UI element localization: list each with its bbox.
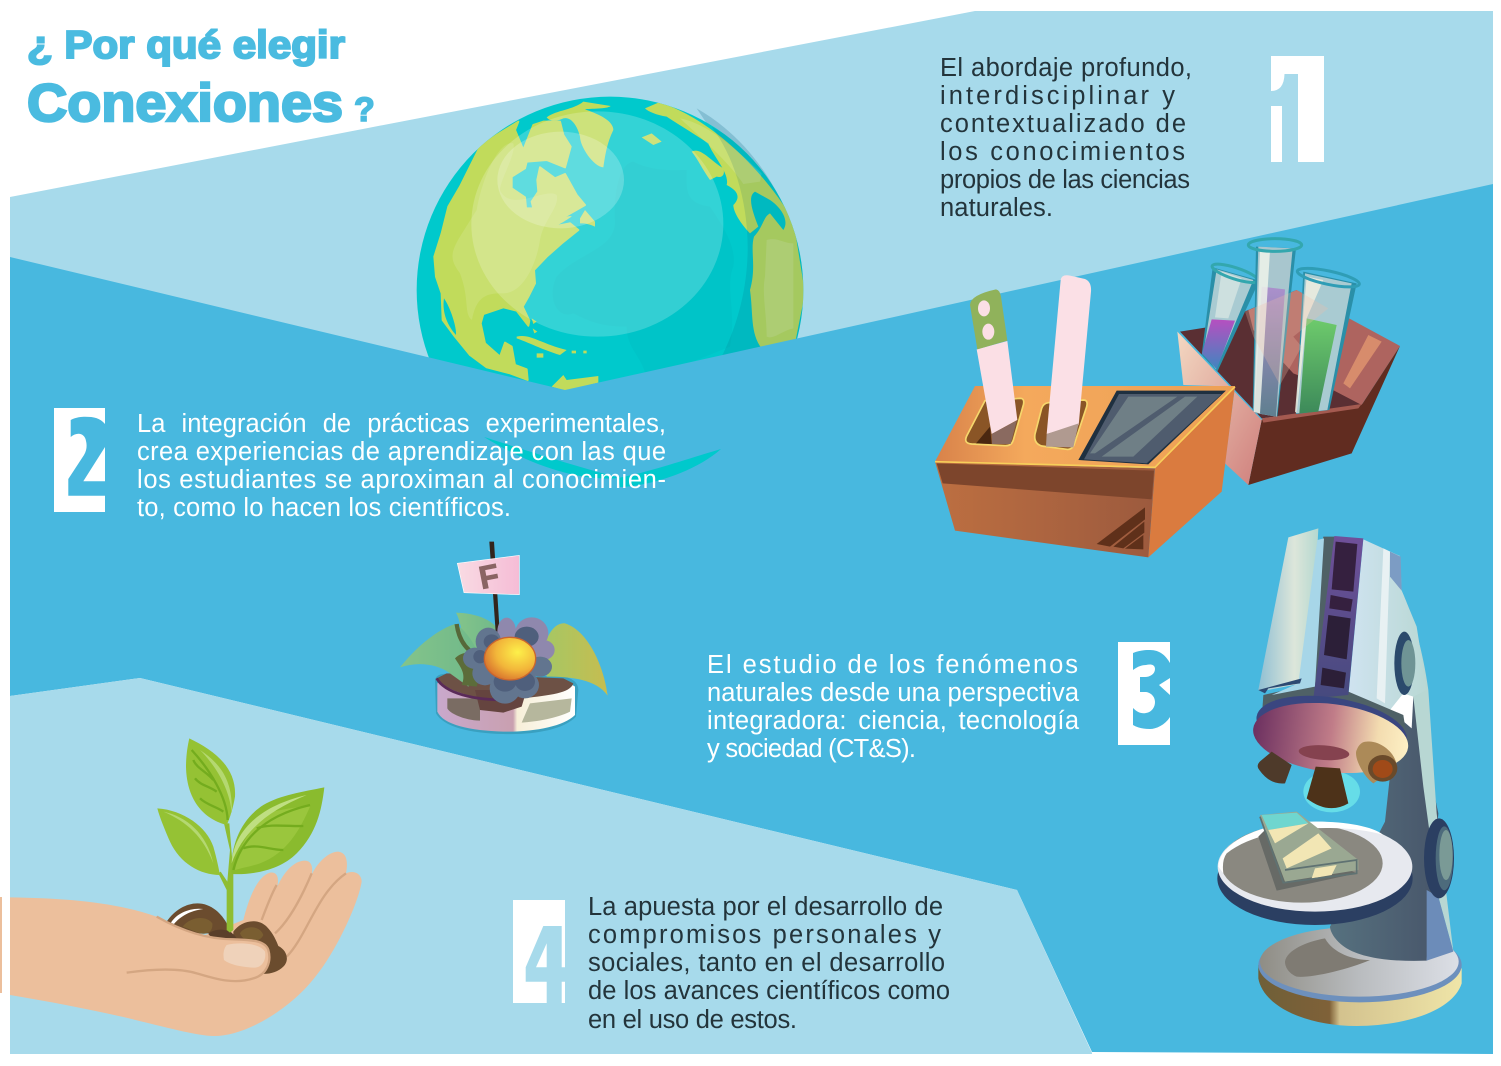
upper body (1348, 539, 1427, 717)
flag pole (489, 542, 500, 637)
tube highlight (1215, 272, 1242, 318)
text line: interdisciplinar y (940, 82, 1175, 110)
title line 2: Conexiones (27, 74, 343, 133)
text line: de los avances científicos como (588, 977, 950, 1005)
screen glass (1084, 394, 1222, 463)
petal (463, 648, 487, 669)
icon: flower in petri dish (400, 542, 608, 734)
box dark band (937, 463, 1154, 499)
stage underside (1217, 832, 1413, 925)
base top (1258, 928, 1462, 1002)
text block 4 (588, 893, 950, 1034)
slide shadow (1258, 830, 1357, 891)
rack rim (1262, 404, 1362, 423)
flower centre (484, 637, 536, 680)
title question mark: ? (354, 91, 375, 129)
small highlight (497, 132, 624, 228)
tube outline (1202, 267, 1259, 372)
grey strip (1300, 537, 1335, 698)
right-side shade (712, 127, 805, 357)
panel window (1332, 542, 1357, 592)
stick hole (978, 300, 990, 316)
centre tube (1248, 239, 1302, 417)
tube highlight (1254, 250, 1270, 413)
slide cyan part (1262, 813, 1308, 830)
rear knob (1424, 818, 1454, 898)
tube liquid (1254, 287, 1285, 417)
rack outer face (1248, 346, 1400, 485)
left leaf (400, 624, 482, 687)
soil shine (171, 909, 203, 924)
stick green cap (970, 289, 1007, 349)
dish body (437, 679, 575, 732)
tube rim (1248, 239, 1302, 251)
white patch (1390, 693, 1413, 728)
flower petals back (497, 617, 555, 660)
flag letter: F (476, 557, 502, 596)
text line: naturales desde una perspectiva (707, 679, 1080, 707)
nose piece band (1252, 686, 1412, 771)
tube liquid (1299, 318, 1337, 413)
petal (490, 673, 520, 704)
glow under objective (1303, 771, 1360, 812)
rear knob face (1436, 826, 1453, 890)
thumb nail (223, 943, 265, 968)
arm and thumb (10, 897, 269, 1035)
text line: y sociedad (CT&S). (707, 735, 916, 763)
stick body (977, 341, 1017, 434)
petal (497, 618, 516, 646)
text line: El abordaje profundo, (940, 54, 1192, 82)
tube rim (1210, 261, 1260, 286)
soil clump left (167, 903, 232, 933)
text line: integradora: ciencia, tecnología (707, 707, 1080, 735)
rack left face (1177, 332, 1262, 485)
petal (476, 628, 501, 656)
screen reflection (1090, 397, 1197, 457)
rack back wall (1248, 290, 1400, 405)
box top face (935, 386, 1235, 468)
panel: top light-blue band (10, 11, 1493, 420)
nose piece (1249, 695, 1412, 781)
globe land and highlights (434, 102, 805, 391)
stick hole (982, 324, 994, 340)
left tube (1202, 261, 1260, 372)
stem (218, 823, 233, 933)
text line: sociales, tanto en el desarrollo (588, 949, 945, 977)
petal (511, 672, 539, 698)
glass slide (1260, 812, 1358, 882)
nose inner shade (1298, 744, 1350, 762)
Iberian island (692, 151, 724, 180)
left back leaf (456, 613, 502, 670)
number 4 (513, 900, 565, 1003)
text line: El estudio de los fenómenos (707, 651, 1078, 679)
rack interior (1180, 290, 1363, 418)
leaf right veins (233, 805, 310, 870)
purple panel (1313, 536, 1363, 698)
centre objective (1307, 767, 1348, 808)
leaf right (231, 787, 324, 874)
soil highlight (183, 918, 263, 941)
globe reflection right crescent (618, 449, 721, 487)
dish purple edge (437, 678, 507, 700)
column blue strip (1427, 890, 1453, 961)
lower body grey skirt (1262, 683, 1407, 737)
box stripes (1097, 507, 1145, 549)
tube glass (1203, 269, 1253, 369)
rack highlight (1343, 335, 1382, 388)
petal (532, 640, 555, 660)
stick body (1047, 275, 1091, 434)
stage top (1218, 822, 1412, 912)
petal (472, 661, 498, 685)
icon: microscope (1217, 528, 1462, 1026)
stick lower part (992, 421, 1017, 444)
globe shadow sliver (697, 108, 802, 267)
slide light bands (1268, 823, 1337, 878)
text block 2 (137, 410, 666, 522)
number 3 (1118, 642, 1170, 745)
dish dark shape under flower (475, 690, 527, 713)
text line: compromisos personales y (588, 921, 941, 949)
right objective barrel (1356, 742, 1397, 783)
tube rim (1296, 265, 1361, 291)
text line: en el uso de estos. (588, 1006, 797, 1034)
left objective (1258, 752, 1292, 783)
dark leaf cluster (455, 653, 483, 687)
base shadow (1285, 938, 1370, 977)
body white stripe (1377, 548, 1390, 703)
title (27, 24, 375, 133)
leaf right highlight (232, 795, 307, 863)
big highlight (471, 111, 723, 337)
fingers and palm (133, 852, 362, 1036)
tube outline (1296, 272, 1357, 414)
left stick (970, 289, 1017, 444)
icon: test tube rack (935, 239, 1400, 557)
petal (515, 617, 548, 649)
dish inner shade right (522, 698, 572, 723)
side dial (1394, 632, 1414, 695)
icon: globe (416, 96, 804, 390)
finger creases (262, 873, 346, 957)
leaf left (157, 808, 220, 875)
leaf top (186, 738, 235, 825)
right tube (1295, 265, 1361, 414)
title line 1: ¿ Por qué elegir (27, 24, 345, 67)
petal shade (494, 672, 516, 692)
stick lower part (1046, 423, 1079, 447)
globe ocean (417, 97, 803, 483)
Africa highlight (680, 118, 793, 337)
stage highlight (1218, 822, 1383, 873)
icon: hand holding seedling (10, 738, 362, 1036)
soil clump right (233, 921, 287, 974)
text line: crea experiencias de aprendizaje con las que (137, 438, 666, 466)
tube liquid (1202, 319, 1235, 369)
text block 1 (940, 54, 1192, 222)
side dial face (1401, 640, 1415, 687)
box right side (1148, 386, 1235, 557)
Europe strip and Africa (645, 103, 805, 348)
text line: contextualizado de (940, 110, 1186, 138)
slide lower edge (1260, 817, 1357, 883)
Arctic sliver (468, 166, 469, 167)
screen (1078, 391, 1226, 464)
petal shade (473, 650, 487, 663)
Baja inlet (444, 298, 456, 335)
rear knob highlight (1439, 830, 1453, 880)
left leaf vein (457, 624, 473, 653)
number 2 (54, 408, 105, 512)
leaf top vein (192, 750, 228, 820)
column light strip (1402, 591, 1453, 952)
box edge highlight (935, 387, 1235, 467)
slot shadow (976, 427, 992, 444)
tube outline (1253, 247, 1296, 417)
petal shade (484, 634, 500, 649)
body top right strip (1390, 552, 1402, 591)
right objective lens rim (1368, 755, 1397, 782)
panel window (1324, 615, 1351, 659)
globe reflection left crescent (484, 437, 620, 479)
petal shade (515, 672, 535, 691)
box front face (935, 462, 1155, 557)
text line: naturales. (940, 194, 1053, 222)
dish rim (435, 673, 578, 734)
base plate (1260, 927, 1459, 997)
small islands (517, 133, 662, 391)
flag (457, 555, 519, 595)
number 1 (1271, 56, 1324, 162)
right objective lens (1373, 760, 1393, 778)
leaf right inner (235, 807, 310, 870)
dish inner shade left (447, 698, 480, 721)
tube glass (1297, 273, 1352, 413)
soil dark lump (208, 930, 236, 938)
edge strip left (0, 897, 2, 993)
text line: los conocimientos (940, 138, 1185, 166)
column (1330, 693, 1438, 961)
flower petals front (463, 628, 552, 704)
text block 3 (707, 651, 1080, 763)
text line: los estudiantes se aproximan al conocimien- (137, 466, 666, 494)
text line: La integración de prácticas experimentales, (137, 410, 666, 438)
flower petal shading (473, 627, 539, 692)
sleeve lower edge (1258, 678, 1302, 693)
rack translucent front (1245, 290, 1328, 385)
petal shade (515, 627, 539, 647)
panel window (1329, 595, 1353, 612)
thumb outline (127, 917, 269, 981)
Newfoundland (553, 210, 595, 227)
leaf top highlight (200, 750, 232, 813)
right leaf (545, 623, 608, 696)
right stick (1046, 275, 1091, 447)
slot two (1035, 400, 1087, 449)
text line: to, como lo hacen los científicos. (137, 494, 511, 522)
text line: La apuesta por el desarrollo de (588, 893, 943, 921)
dish soil band (437, 673, 573, 700)
tube glass (1253, 247, 1293, 417)
North America (434, 122, 585, 380)
slot one (966, 398, 1024, 446)
leaf left highlight (163, 812, 213, 863)
Greenland (547, 102, 613, 167)
text line: propios de las ciencias (940, 166, 1190, 194)
blue strip (1272, 538, 1324, 695)
land inner highlights (452, 143, 557, 320)
base rim (1258, 965, 1462, 1026)
petal (528, 657, 552, 677)
panel: lower light-blue band (10, 678, 1092, 1054)
stage inner (1221, 824, 1383, 903)
tube highlight (1295, 277, 1323, 413)
panel window (1321, 668, 1346, 688)
sleeve (1258, 528, 1318, 690)
